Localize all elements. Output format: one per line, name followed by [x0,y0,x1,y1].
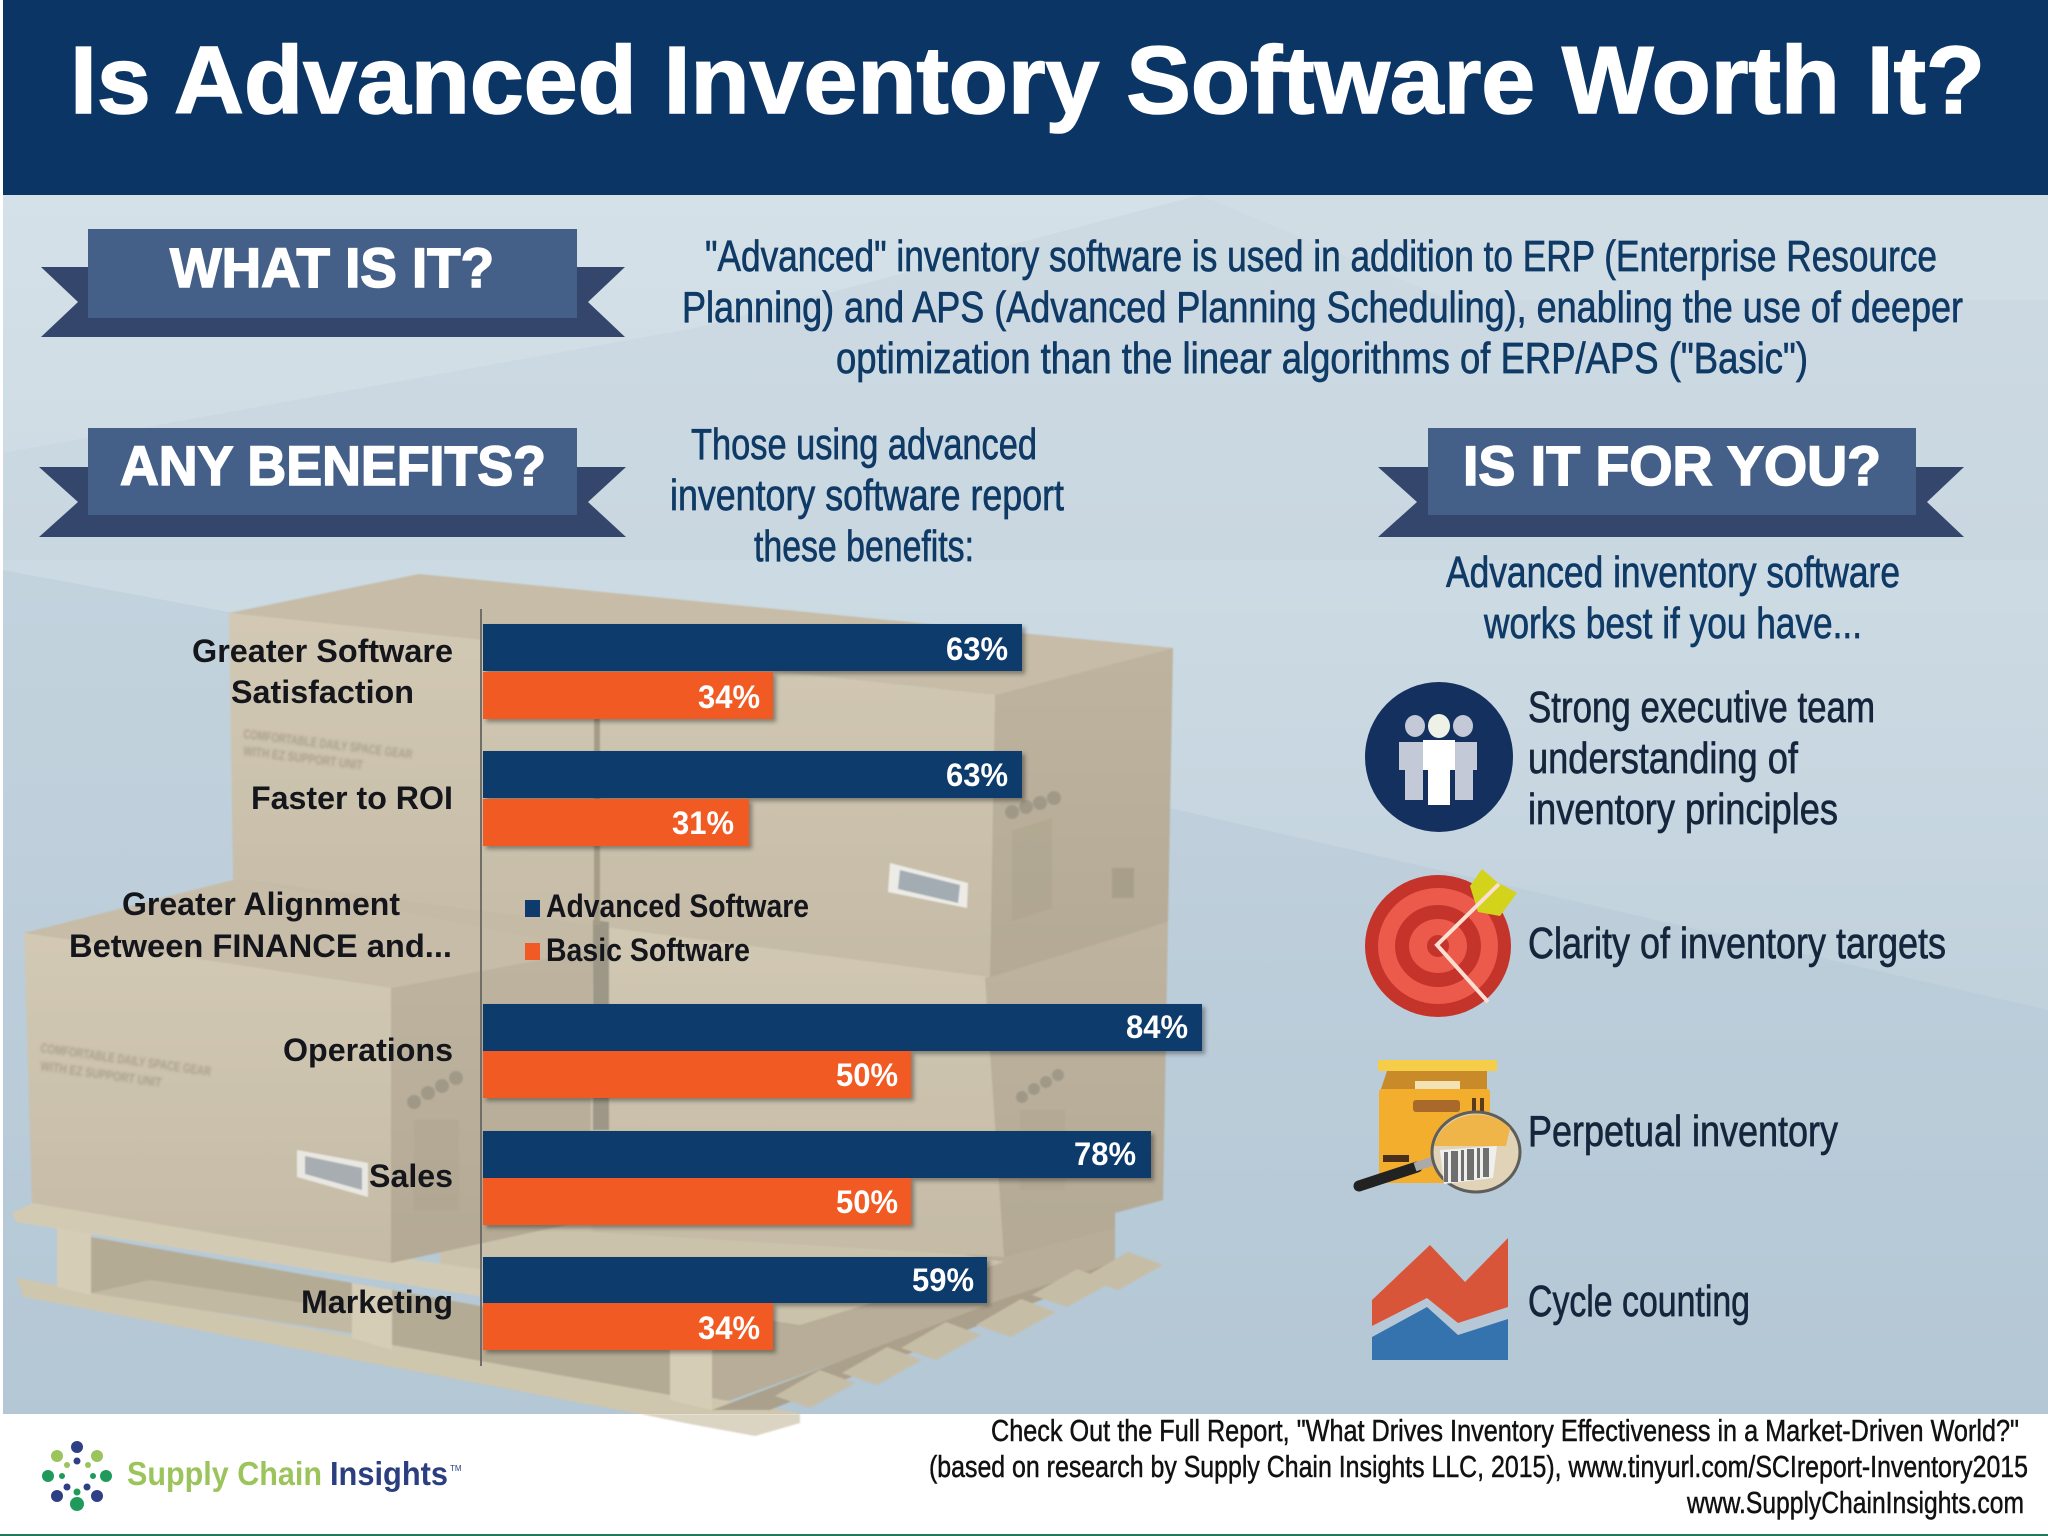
box print: COMFORTABLE DAILY SPACE GEAR [40,1040,212,1079]
item text: executive team: inventory principles [1528,785,1838,834]
bar values: 59% [912,1262,974,1298]
box print: WITH EZ SUPPORT UNIT [243,743,364,773]
for-you intro text [1446,548,1900,648]
icon: executive team [1365,682,1513,832]
bar chart [69,609,1202,1366]
legend: Advanced Software [546,888,809,924]
legend: Basic Software [546,932,750,968]
item text: executive team: understanding of [1528,734,1799,783]
bar values: 63% [946,757,1008,793]
icon: box with magnifier [1359,1060,1520,1192]
bars: advanced software [483,624,1202,1303]
ribbon: is it for you: IS IT FOR YOU? [1463,434,1881,497]
logo [42,1441,462,1511]
definition text [682,232,1963,383]
bar values: 34% [698,679,760,715]
category labels: Operations [283,1032,453,1068]
logo: Insights [330,1455,448,1492]
legend [525,888,809,968]
ribbon: any benefits [39,428,626,537]
logo: TM [450,1464,462,1473]
category labels: Greater Software [192,633,453,669]
category labels: Faster to ROI [251,780,453,816]
for-you intro text: works best if you have... [1483,599,1862,648]
ribbon: what is it: WHAT IS IT? [170,236,494,299]
ribbon: is it for you [1378,428,1964,537]
bar values: 50% [836,1057,898,1093]
category labels: Between FINANCE and... [69,928,452,964]
benefits intro text: inventory software report [670,471,1064,520]
item text: executive team [1528,683,1875,834]
background panel [3,195,2048,1414]
bar values: 50% [836,1184,898,1220]
item text: cycle counting: Cycle counting [1528,1277,1750,1326]
category labels: Marketing [301,1284,453,1320]
report citation [929,1413,2028,1520]
bar values: 34% [698,1310,760,1346]
title: Is Advanced Inventory Software Worth It? [70,27,1985,134]
item text: perpetual inventory: Perpetual inventory [1528,1107,1838,1156]
footer [0,1413,2048,1536]
box print: COMFORTABLE DAILY SPACE GEAR [243,726,414,762]
benefits intro text: Those using advanced [691,420,1037,469]
icon: area chart [1372,1238,1508,1360]
category labels: Sales [369,1158,453,1194]
category labels: Greater Alignment [122,886,400,922]
category labels: Satisfaction [231,674,414,710]
category labels [69,633,453,1320]
bar values: 78% [1074,1136,1136,1172]
ribbon: what is it [41,229,625,337]
benefits intro text [670,420,1064,571]
definition text: optimization than the linear algorithms of ERP/APS ("Basic") [836,334,1808,383]
bar values: 31% [672,805,734,841]
icon: target [1365,869,1517,1017]
photo: cardboard boxes on a pallet [12,574,1173,1436]
item text: executive team: Strong executive team [1528,683,1875,732]
item text: targets: Clarity of inventory targets [1528,919,1946,968]
bars: basic software [483,672,911,1350]
benefits intro text: these benefits: [754,522,974,571]
bar values [672,631,1188,1346]
box print: WITH EZ SUPPORT UNIT [40,1058,163,1090]
header band [3,0,2048,195]
for-you intro text: Advanced inventory software [1446,548,1900,597]
ribbon: any benefits: ANY BENEFITS? [120,434,546,497]
bar values: 84% [1126,1009,1188,1045]
box print [40,726,414,1090]
bar values: 63% [946,631,1008,667]
logo: Supply Chain [127,1455,322,1492]
